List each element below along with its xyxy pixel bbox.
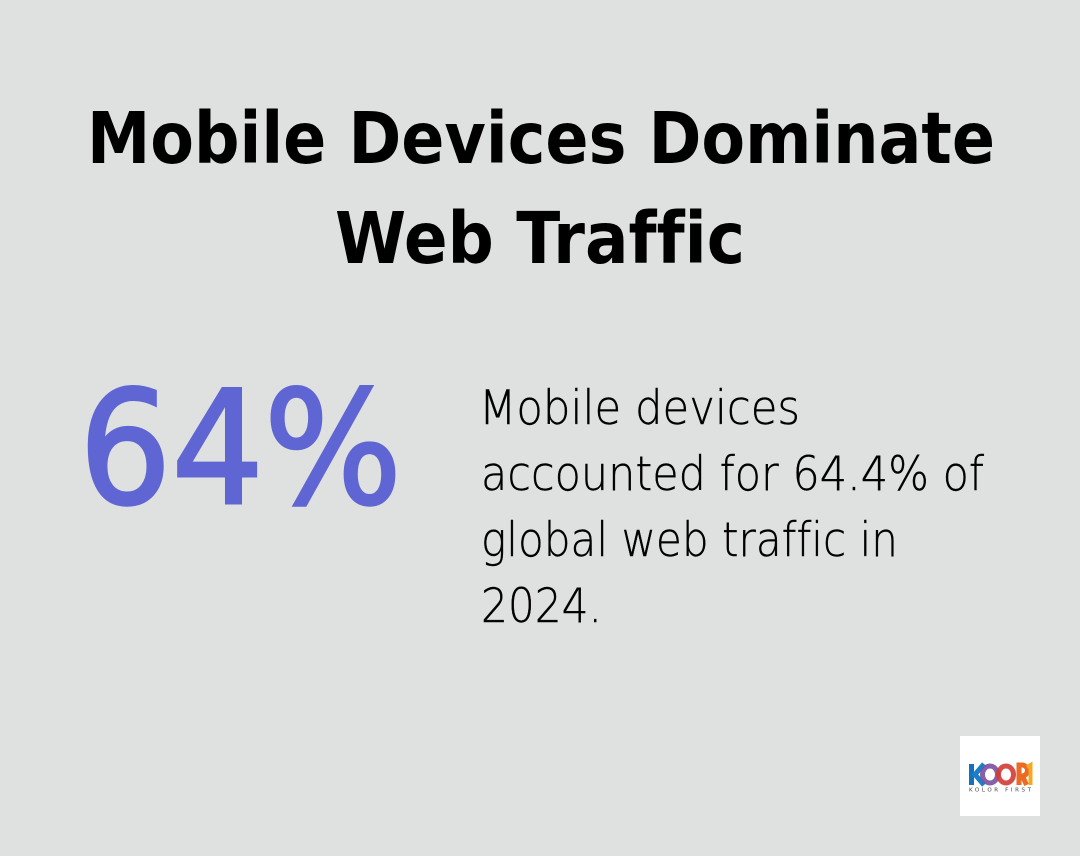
- big statistic: 64%: 64%: [79, 358, 402, 541]
- title: Mobile Devices Dominate: [87, 97, 995, 180]
- title: [87, 97, 995, 280]
- logo tagline: KOLOR FIRST: [969, 788, 1032, 794]
- description text: 2024.: [481, 579, 602, 634]
- logo: Koor1 Kolor First: [960, 736, 1040, 816]
- description text: accounted for 64.4% of: [481, 447, 984, 502]
- title: Web Traffic: [335, 197, 745, 280]
- description text: global web traffic in: [481, 513, 898, 568]
- description text: Mobile devices: [479, 381, 800, 436]
- logo letters: [972, 764, 1028, 785]
- description text: [479, 381, 984, 634]
